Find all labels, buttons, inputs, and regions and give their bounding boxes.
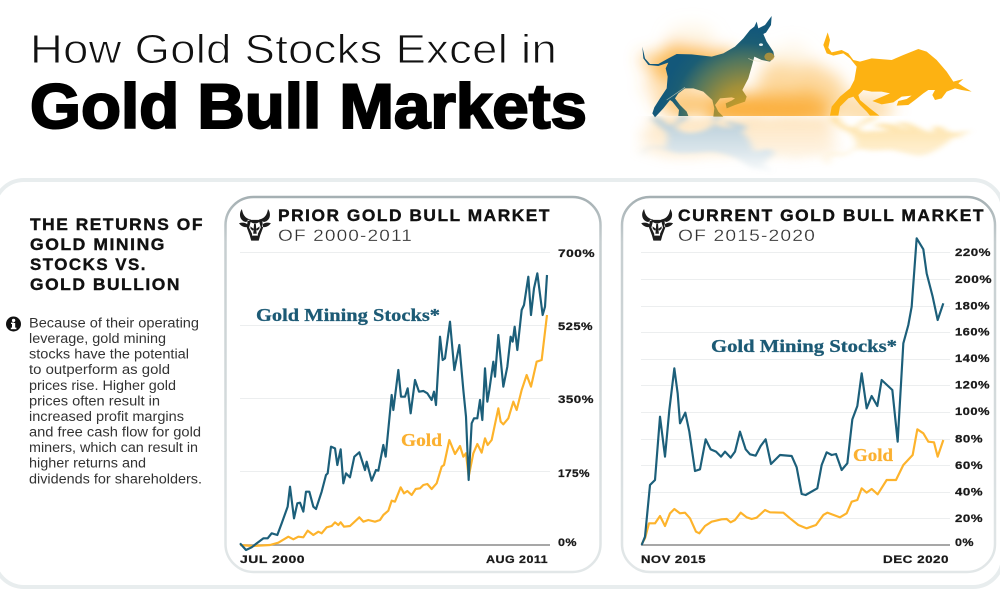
heading: returns of gold mining stocks vs gold bullion <box>30 215 204 294</box>
heading: returns of gold mining stocks vs gold bullion: GOLD BULLION <box>30 275 181 294</box>
chart subheading: OF 2015-2020 <box>678 226 816 245</box>
body text <box>29 316 202 486</box>
y axis labels: 180% <box>955 300 990 312</box>
body text: dividends for shareholders. <box>29 472 202 486</box>
icon: bull head <box>239 209 271 241</box>
heading: returns of gold mining stocks vs gold bullion: STOCKS VS. <box>30 255 147 274</box>
y axis labels: 60% <box>955 460 983 472</box>
series label: gold mining stocks: Gold Mining Stocks* <box>256 305 440 325</box>
y axis labels: 0% <box>558 537 577 549</box>
icon: gold bull <box>823 32 972 116</box>
y axis labels <box>955 247 992 549</box>
body text: Because of their operating <box>29 316 199 330</box>
title: how gold stocks excel in: How Gold Stocks Excel in <box>30 26 557 72</box>
y axis labels: 40% <box>955 486 983 498</box>
y axis labels: 220% <box>955 247 991 259</box>
icon: info <box>6 316 21 332</box>
y axis labels: 20% <box>955 513 983 525</box>
line: gold <box>642 429 943 544</box>
chart heading: PRIOR GOLD BULL MARKET <box>278 206 551 225</box>
body text: to outperform as gold <box>29 362 170 377</box>
panel: current gold bull market chart <box>622 197 995 572</box>
body text: increased profit margins <box>29 409 184 424</box>
line: gold mining stocks <box>642 238 943 545</box>
y axis labels: 100% <box>955 406 990 418</box>
x axis labels: JUL 2000 <box>240 554 305 566</box>
icon: bull head <box>641 209 673 241</box>
body text: higher returns and <box>29 456 146 470</box>
x axis labels <box>240 554 548 566</box>
series label: gold: Gold <box>401 430 442 450</box>
x axis labels: NOV 2015 <box>641 554 706 566</box>
body text: prices often result in <box>29 394 160 408</box>
body text: miners, which can result in <box>29 440 198 455</box>
grid lines <box>240 252 550 472</box>
body text: leverage, gold mining <box>29 331 166 346</box>
series label: gold mining stocks: Gold Mining Stocks* <box>711 336 897 356</box>
x axis labels: DEC 2020 <box>883 554 949 566</box>
body text: and free cash flow for gold <box>29 424 201 440</box>
y axis labels: 700% <box>558 248 595 260</box>
reflection of bulls <box>636 116 970 168</box>
x axis labels <box>641 554 949 566</box>
heading: returns of gold mining stocks vs gold bullion: THE RETURNS OF <box>30 215 204 234</box>
body text: stocks have the potential <box>29 346 189 362</box>
series label: gold: Gold <box>853 445 893 465</box>
panel: intro text <box>6 215 204 486</box>
line: gold <box>240 315 547 546</box>
y axis labels: 160% <box>955 326 990 338</box>
y axis labels: 525% <box>558 321 593 333</box>
icon: teal bull <box>642 16 774 117</box>
y axis labels: 80% <box>955 434 983 446</box>
y axis labels: 175% <box>558 468 590 480</box>
line: gold mining stocks <box>240 273 547 550</box>
chart subheading: OF 2000-2011 <box>278 226 413 245</box>
panel: prior gold bull market chart <box>226 197 600 572</box>
y axis labels: 0% <box>955 537 974 549</box>
title: gold bull markets: Gold Bull Markets <box>30 72 587 142</box>
grid lines <box>641 252 950 518</box>
y axis labels: 350% <box>558 394 594 406</box>
illustration: two bulls with gold dust and reflection <box>642 16 972 176</box>
y axis labels: 200% <box>955 274 992 286</box>
y axis labels: 120% <box>955 380 990 392</box>
x axis labels: AUG 2011 <box>486 554 548 566</box>
body text: prices rise. Higher gold <box>29 378 176 393</box>
chart heading: CURRENT GOLD BULL MARKET <box>678 206 985 225</box>
main panel outline <box>0 180 1000 587</box>
heading: returns of gold mining stocks vs gold bullion: GOLD MINING <box>30 235 166 254</box>
y axis labels <box>558 248 595 549</box>
y axis labels: 140% <box>955 353 990 365</box>
